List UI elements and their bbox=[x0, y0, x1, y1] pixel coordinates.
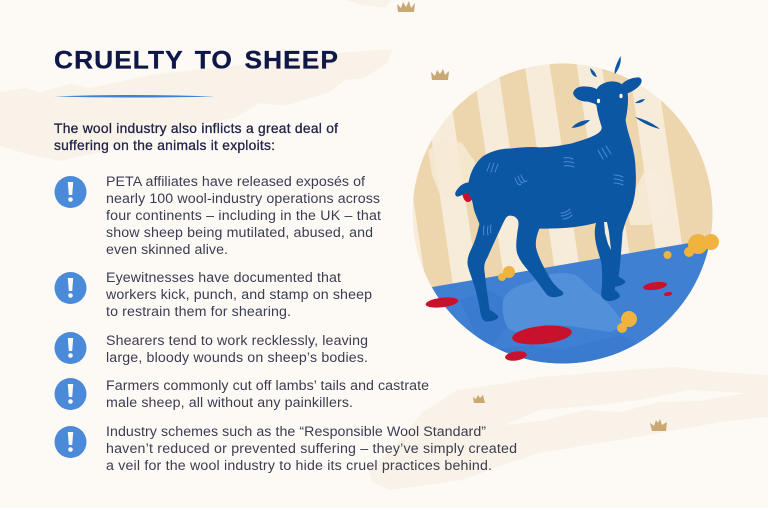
yellow splats bbox=[498, 234, 719, 333]
title: CRUELTY TO SHEEP bbox=[54, 46, 339, 74]
text 2: Eyewitnesses have documented that bbox=[106, 270, 341, 286]
text 1: show sheep being mutilated, abused, and bbox=[106, 225, 373, 241]
text 3: Shearers tend to work recklessly, leaving bbox=[106, 333, 368, 349]
text 2: workers kick, punch, and stamp on sheep bbox=[105, 287, 372, 303]
sheep eyes bbox=[597, 94, 623, 103]
icon: exclamation 1 bbox=[54, 176, 86, 208]
icon: exclamation 2 bbox=[54, 272, 86, 304]
text 4 bbox=[106, 378, 429, 411]
icon: grass top bbox=[397, 1, 415, 12]
list item 1 bbox=[54, 174, 381, 258]
text 1: four continents – including in the UK – that bbox=[106, 208, 381, 224]
brush highlight: bottom right bbox=[505, 390, 745, 425]
brush stroke: top right bbox=[345, 0, 392, 8]
text 1: PETA affiliates have released exposés of bbox=[106, 174, 365, 190]
circle scene bbox=[412, 64, 712, 364]
intro text: The wool industry also inflicts a great deal of bbox=[54, 121, 338, 136]
brush stroke: top left bbox=[0, 49, 393, 161]
sheep leg gap bbox=[604, 222, 611, 250]
sheep bbox=[456, 78, 641, 321]
intro text: suffering on the animals it exploits: bbox=[54, 138, 275, 153]
blood pools bbox=[425, 184, 672, 362]
intro text bbox=[54, 121, 338, 153]
text 1 bbox=[106, 174, 381, 258]
icon: exclamation 3 bbox=[54, 332, 86, 364]
list item 5 bbox=[54, 424, 517, 474]
text 5: a veil for the wool industry to hide its cruel practices behind. bbox=[106, 458, 492, 474]
text 3: large, bloody wounds on sheep’s bodies. bbox=[106, 350, 368, 366]
text 1: nearly 100 wool-industry operations across bbox=[106, 191, 380, 207]
text 1: even skinned alive. bbox=[106, 242, 228, 258]
text 3 bbox=[106, 333, 368, 366]
text 4: Farmers commonly cut off lambs’ tails and castrate bbox=[106, 378, 429, 394]
ground bbox=[432, 243, 708, 364]
sheep wool marks bbox=[484, 146, 623, 235]
text 4: male sheep, all without any painkillers. bbox=[106, 395, 353, 411]
text 5 bbox=[106, 424, 517, 474]
text 5: haven’t reduced or prevented suffering – they’ve simply created bbox=[106, 441, 517, 457]
title underline bbox=[54, 95, 215, 98]
list item 4 bbox=[54, 378, 429, 411]
text 5: Industry schemes such as the “Responsible Wool Standard” bbox=[106, 424, 486, 440]
illustration: sheep in circle bbox=[412, 56, 719, 364]
brush stroke: bottom right bbox=[368, 367, 768, 490]
icon: grass lower bbox=[473, 395, 485, 403]
list item 3 bbox=[54, 332, 368, 366]
icon: exclamation 5 bbox=[54, 426, 86, 458]
distress marks bbox=[572, 56, 660, 129]
text 2 bbox=[105, 270, 372, 320]
text 2: to restrain them for shearing. bbox=[106, 304, 291, 320]
list item 2 bbox=[54, 270, 372, 320]
icon: exclamation 4 bbox=[54, 378, 86, 410]
icon: grass right bbox=[650, 419, 667, 431]
icon: grass upper bbox=[431, 69, 449, 80]
